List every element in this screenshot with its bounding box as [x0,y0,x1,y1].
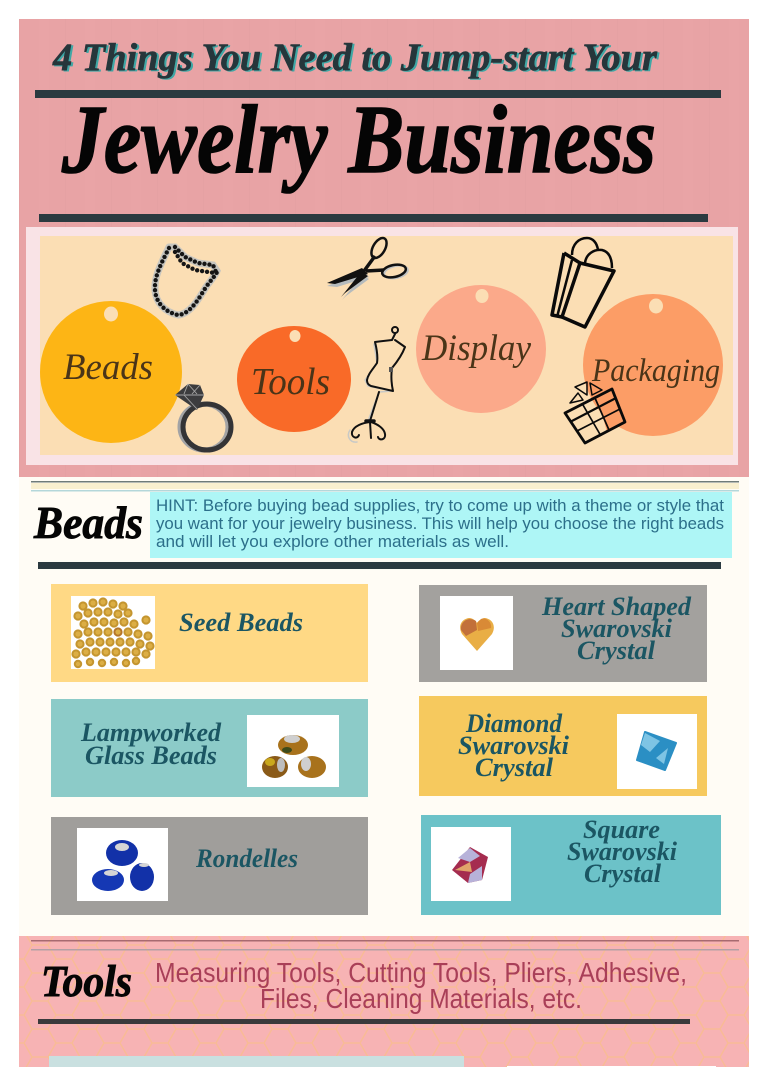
callout: hint: you want for your jewelry business. This will help you choose the right beads [156,514,724,533]
card: Lampworked Glass Beads: Glass Beads [85,741,217,770]
icon: gift box [565,382,625,443]
icon: necklace [155,247,217,315]
icon: scissors [327,235,409,300]
panel: four categories [26,227,738,465]
tag: Display [416,285,546,413]
tag: Beads [40,301,182,443]
tag: Beads: Beads [63,347,153,388]
callout: hint [150,492,732,558]
card: Diamond Swarovski Crystal [419,696,707,796]
text: tools list: Measuring Tools, Cutting Tools, Pliers, Adhesive, [155,957,687,988]
tag: Packaging: Packaging [591,353,720,389]
text: tools list [155,957,687,1014]
tag: Tools: Tools [251,361,330,403]
callout: hint: and will let you explore other materials as well. [156,532,509,551]
card: Square Swarovski Crystal: Swarovski [567,837,678,866]
card: Diamond Swarovski Crystal: Swarovski [458,731,570,760]
title: Jewelry Business: Jewelry Business [61,86,656,194]
tag: Tools [237,326,351,432]
title: subtitle line: 4 Things You Need to Jump-start Your [52,36,658,79]
card: Heart Shaped Swarovski Crystal: Heart Shaped [541,592,692,621]
card: Rondelles [51,817,368,915]
card: Diamond Swarovski Crystal: Crystal [475,753,554,782]
icon: shopping bag [552,238,614,327]
image: blue rondelles [92,840,154,891]
image: lampworked beads [262,735,326,778]
card: Square Swarovski Crystal: Crystal [584,859,662,888]
image: seed beads [72,598,154,667]
tag: Display: Display [421,328,532,369]
heading: Tools: Tools [41,957,132,1006]
card: Heart Shaped Swarovski Crystal: Swarovski [561,614,673,643]
image: red cube crystal [452,847,488,883]
card: Lampworked Glass Beads [51,699,368,797]
image: blue diamond crystal [637,732,676,770]
title: subtitle line: 4 Things You Need to Jump-start Your [54,37,660,80]
card: Seed Beads: Seed Beads [179,608,303,637]
heading: Beads: Beads [33,497,143,548]
icon: diamond ring [175,384,231,450]
panel: tools section [19,936,749,1067]
card: Seed Beads [51,584,368,682]
card: Heart Shaped Swarovski Crystal: Crystal [577,636,656,665]
text: tools list: Files, Cleaning Materials, etc. [260,983,582,1014]
card: Square Swarovski Crystal [421,815,721,915]
card: Square Swarovski Crystal: Square [583,815,660,844]
card: Diamond Swarovski Crystal: Diamond [465,709,563,738]
panel: beads section [19,477,749,936]
panel: header [19,19,749,477]
callout: hint: HINT: Before buying bead supplies, try to come up with a theme or style that [156,496,724,515]
tag: Packaging [583,294,723,436]
card: Heart Shaped Swarovski Crystal [419,585,707,682]
icon: dress form [348,327,405,442]
card: Lampworked Glass Beads: Lampworked [80,718,222,747]
image: heart crystal [460,618,494,651]
card: Rondelles: Rondelles [195,844,298,873]
